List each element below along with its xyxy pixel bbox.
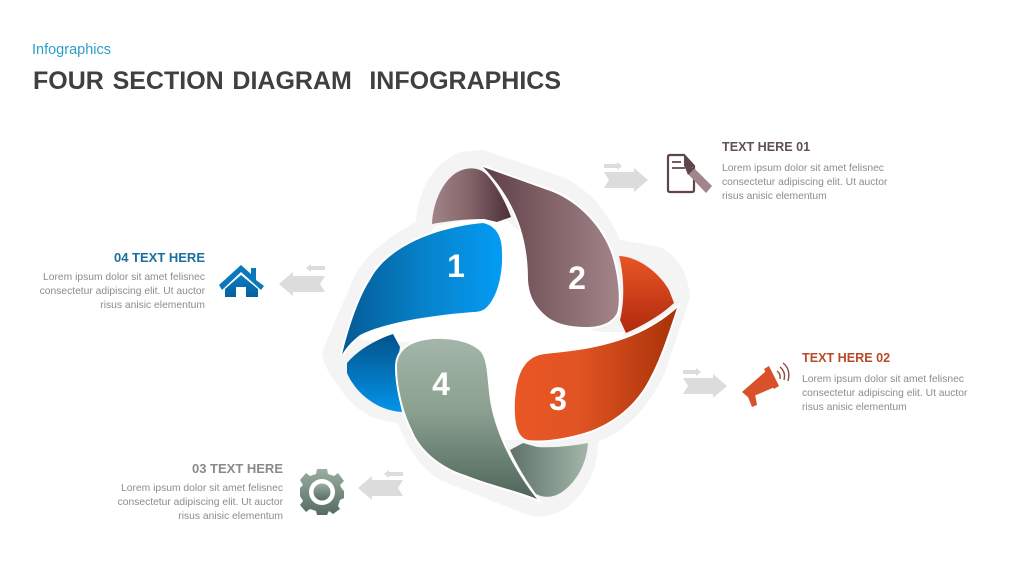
body 03: consectetur adipiscing elit. Ut auctor — [118, 497, 283, 508]
icon: megaphone — [742, 363, 789, 407]
body 01: consectetur adipiscing elit. Ut auctor — [722, 177, 887, 188]
text block 04 — [40, 250, 205, 311]
center white area — [360, 215, 625, 440]
section 2: mauve ribbon — [483, 167, 619, 327]
arrow: bottom left — [358, 470, 403, 500]
number 2: 2 — [568, 260, 586, 296]
body 02: risus anisic elementum — [802, 402, 907, 413]
halo behind the diagram — [322, 150, 690, 517]
body 04: risus anisic elementum — [100, 300, 205, 311]
number 4: 4 — [432, 366, 450, 402]
body 02 — [802, 374, 968, 413]
icon: document and pencil — [668, 155, 712, 193]
section 1: blue ribbon — [342, 223, 502, 355]
body 01: risus anisic elementum — [722, 191, 827, 202]
body 03 — [118, 483, 283, 522]
icon: house — [219, 265, 264, 297]
text block 01 — [722, 140, 888, 202]
number 1: 1 — [447, 248, 465, 284]
heading 01: TEXT HERE 01 — [722, 140, 810, 154]
arrow: top right — [604, 162, 648, 192]
section 4: gray ribbon — [397, 339, 537, 499]
body 03: risus anisic elementum — [178, 511, 283, 522]
body 04 — [40, 272, 205, 311]
body 04: Lorem ipsum dolor sit amet felisnec — [43, 272, 205, 283]
body 01: Lorem ipsum dolor sit amet felisnec — [722, 163, 884, 174]
icon: gear — [300, 469, 344, 515]
ribbon back: mauve — [432, 168, 511, 224]
ribbon back: gray — [510, 443, 588, 497]
text block 02 — [802, 351, 968, 413]
ribbon back: blue — [347, 334, 402, 412]
number 3: 3 — [549, 381, 567, 417]
text block 03 — [118, 461, 283, 522]
arrow: right — [683, 368, 727, 398]
section 3: red ribbon — [515, 308, 677, 441]
title: FOUR SECTION DIAGRAM INFOGRAPHICS — [33, 67, 561, 95]
body 03: Lorem ipsum dolor sit amet felisnec — [121, 483, 283, 494]
heading 04: 04 TEXT HERE — [114, 250, 205, 265]
heading 02: TEXT HERE 02 — [802, 351, 890, 365]
heading 03: 03 TEXT HERE — [192, 461, 283, 476]
arrow: left — [279, 264, 325, 296]
body 02: consectetur adipiscing elit. Ut auctor — [802, 388, 967, 399]
subtitle: Infographics — [32, 42, 111, 58]
ribbon back: red — [619, 256, 674, 333]
body 01 — [722, 163, 888, 202]
body 04: consectetur adipiscing elit. Ut auctor — [40, 286, 205, 297]
body 02: Lorem ipsum dolor sit amet felisnec — [802, 374, 964, 385]
